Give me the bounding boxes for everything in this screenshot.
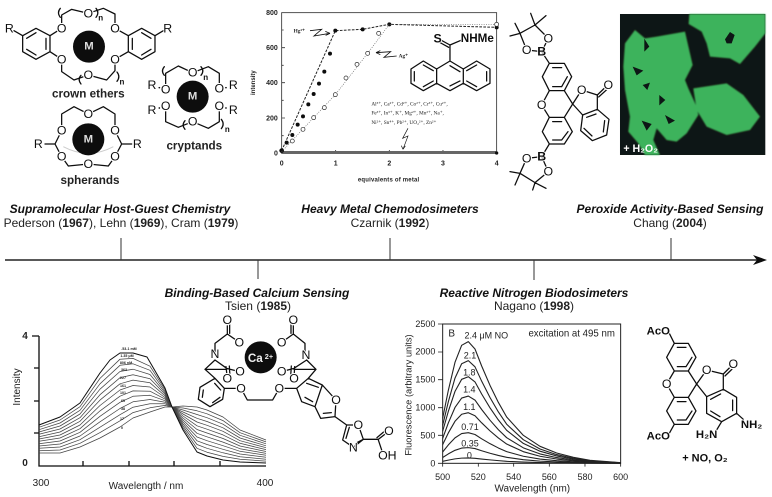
- data series: Ag+: [282, 22, 499, 152]
- molecule: cryptands: R: [229, 103, 238, 117]
- molecule: spherands: spherands: [61, 174, 119, 187]
- chart frame: [282, 13, 497, 153]
- axis ticks and labels: 520: [471, 472, 486, 482]
- y axis ticks and labels: 800: [266, 10, 278, 17]
- concentration labels: 101: [120, 391, 126, 395]
- concentration labels: 0: [121, 426, 123, 430]
- molecule: anthracene thioamide: [411, 32, 494, 91]
- molecule: calcium chelator: O: [277, 335, 286, 349]
- axis ticks and labels: 1500: [415, 375, 435, 385]
- milestone: supramolecular host-guest chemistry: Pederson (1967), Lehn (1969), Cram (1979): [4, 216, 238, 230]
- annotation: Ag+: Ag⁺: [399, 53, 408, 59]
- molecule: crown ethers: n: [98, 14, 103, 23]
- concentration labels: 38: [121, 407, 125, 411]
- panel: nitric oxide fluorescence chart: [403, 319, 762, 495]
- molecule: calcium chelator: O: [331, 393, 341, 407]
- molecule: spherands: R: [133, 137, 142, 151]
- axis labels: 4: [22, 331, 28, 342]
- milestone: binding-based calcium sensing: [165, 286, 350, 313]
- y axis ticks and labels: 4: [495, 160, 499, 167]
- concentration labels: 363: [121, 368, 127, 372]
- y axis ticks and labels: 2: [387, 160, 391, 167]
- molecule: cryptands: R: [148, 103, 157, 117]
- molecule: diacetyl diaminofluorescein: H₂N: [696, 429, 717, 441]
- fluorescence curves: [443, 342, 621, 463]
- curve and panel labels: 0: [467, 451, 472, 461]
- molecule: crown ethers: O: [110, 21, 120, 35]
- milestone: peroxide activity-based sensing: [577, 202, 764, 230]
- molecule: calcium chelator: 2+: [265, 352, 273, 361]
- axis labels: 300: [33, 478, 50, 489]
- image: fluorescence micrograph: [620, 14, 765, 155]
- data series: Hg2+: [279, 22, 499, 155]
- chart axes: [32, 336, 266, 466]
- axis ticks and labels: 1000: [415, 402, 435, 412]
- milestone: heavy metal chemodosimeters: Heavy Metal Chemodosimeters: [301, 202, 479, 216]
- molecule: spherands: R: [34, 137, 43, 151]
- annotation: other metal ions: Fe³⁺, In³⁺, K⁺, Mg²⁺, Mn²⁺, Na⁺,: [371, 111, 444, 117]
- concentration labels: 65: [121, 399, 125, 403]
- y axis ticks and labels: 600: [266, 45, 278, 52]
- axis ticks and labels: Fluorescence (arbitrary units): [403, 334, 413, 456]
- molecule: diacetyl diaminofluorescein: + NO, O₂: [682, 452, 728, 464]
- curve and panel labels: [448, 328, 615, 461]
- timeline axis with arrow: [5, 238, 767, 280]
- molecule: calcium chelator: O: [236, 381, 246, 395]
- molecule: spherands: O: [57, 124, 66, 138]
- molecule: calcium chelator: O: [235, 335, 244, 349]
- molecule: anthracene thioamide: NHMe: [461, 32, 494, 45]
- molecule: cryptands: O: [161, 99, 170, 113]
- molecule: calcium chelator: O: [289, 313, 298, 327]
- molecule: diacetyl diaminofluorescein: NH₂: [741, 419, 762, 431]
- axis labels: Wavelength / nm: [109, 481, 183, 492]
- molecule: cryptands: O: [188, 66, 197, 80]
- panel: heavy metal titration chart: [251, 10, 499, 184]
- molecule: crown ethers: R: [163, 21, 172, 35]
- milestone: peroxide activity-based sensing: Peroxide Activity-Based Sensing: [577, 202, 764, 216]
- molecule: cryptands: R: [229, 78, 238, 92]
- concentration labels: [120, 347, 137, 430]
- concentration labels: 1.35 μM: [120, 354, 134, 358]
- molecule: cryptands: O: [161, 82, 170, 96]
- milestone: supramolecular host-guest chemistry: Supramolecular Host-Guest Chemistry: [10, 202, 232, 216]
- molecule: spherands: O: [84, 157, 93, 171]
- axis ticks and labels: 500: [435, 472, 450, 482]
- milestone: binding-based calcium sensing: Tsien (1985): [225, 299, 291, 313]
- molecule: boronate fluorescein: O: [577, 83, 586, 97]
- annotation: Hg2+: [294, 28, 330, 36]
- axis ticks and labels: 540: [506, 472, 521, 482]
- molecule: calcium chelator: Ca: [248, 352, 263, 365]
- concentration labels: 806 nM: [120, 361, 132, 365]
- molecule: calcium chelator: O: [277, 365, 286, 379]
- y axis ticks and labels: 0: [280, 160, 284, 167]
- molecule: crown ethers: O: [57, 21, 66, 35]
- milestone: reactive nitrogen biodosimeters: Reactive Nitrogen Biodosimeters: [440, 286, 629, 300]
- molecule: cryptands: cryptands: [166, 139, 222, 152]
- curve and panel labels: 1.1: [463, 402, 476, 412]
- curve and panel labels: 1.4: [463, 385, 476, 395]
- annotation: Hg2+: Hg²⁺: [294, 28, 305, 34]
- y axis ticks and labels: 1: [334, 160, 338, 167]
- annotation: Ag+: [376, 51, 408, 59]
- concentration labels: .53-1 mM: [121, 347, 137, 351]
- axis labels: 400: [257, 478, 274, 489]
- milestone: supramolecular host-guest chemistry: [4, 202, 238, 230]
- molecule: crown ethers: O: [110, 52, 120, 66]
- molecule: spherands: O: [110, 124, 120, 138]
- spectra curves: [39, 353, 266, 463]
- y axis ticks and labels: 200: [266, 115, 278, 122]
- y axis ticks and labels: 3: [441, 160, 445, 167]
- molecule: boronate fluorescein: B: [537, 150, 546, 164]
- annotation: other metal ions: Al³⁺, Ca²⁺, Cd²⁺, Co²⁺, Cr³⁺, Cu²⁺,: [371, 101, 448, 107]
- annotation: other metal ions: Ni²⁺, Sn⁴⁺, Pb²⁺, UO₂²⁺, Zn²⁺: [371, 120, 437, 126]
- axis ticks and labels: 580: [577, 472, 592, 482]
- milestone: peroxide activity-based sensing: Chang (2004): [633, 216, 707, 230]
- molecule: diacetyl diaminofluorescein: [647, 326, 762, 464]
- panel: calcium spectra chart: [12, 331, 274, 492]
- molecule: cryptands: O: [215, 81, 224, 95]
- molecule: cryptands: O: [188, 115, 197, 129]
- molecule: boronate fluorescein: O: [604, 78, 613, 92]
- milestone: reactive nitrogen biodosimeters: Nagano (1998): [494, 299, 574, 313]
- label: H2O2: + H₂O₂: [623, 143, 658, 155]
- molecule: calcium chelator: O: [223, 313, 232, 327]
- molecule: calcium chelator: OH: [378, 449, 397, 463]
- molecule: calcium chelator: N: [302, 348, 310, 362]
- concentration labels: 227: [120, 376, 126, 380]
- molecule: diacetyl diaminofluorescein: AcO: [647, 431, 670, 443]
- molecule: cryptands: n: [203, 73, 208, 82]
- milestone: heavy metal chemodosimeters: Czarnik (1992): [351, 216, 429, 230]
- molecule: diacetyl diaminofluorescein: AcO: [647, 326, 670, 338]
- molecule: cryptands: [148, 66, 238, 152]
- concentration labels: 161: [120, 384, 126, 388]
- molecule: cryptands: O: [215, 99, 224, 113]
- curve and panel labels: 1.8: [463, 368, 476, 378]
- concentration labels: 17: [120, 417, 124, 421]
- molecule: calcium chelator: N: [349, 440, 358, 454]
- molecule: calcium chelator: O: [354, 418, 363, 432]
- curve and panel labels: excitation at 495 nm: [528, 329, 615, 340]
- molecule: spherands: O: [57, 150, 66, 164]
- axis ticks and labels: 600: [613, 472, 628, 482]
- molecule: calcium chelator: N: [211, 347, 219, 361]
- molecule: boronate fluorescein: [510, 13, 613, 190]
- molecule: calcium chelator: [198, 313, 397, 463]
- molecule: calcium chelator: O: [223, 371, 232, 385]
- molecule: crown ethers: crown ethers: [52, 88, 125, 101]
- y axis ticks and labels: [251, 10, 499, 184]
- molecule: spherands: M: [84, 133, 93, 145]
- curve and panel labels: 0.71: [461, 422, 479, 432]
- curve and panel labels: 2.4 μM NO: [465, 331, 508, 341]
- curve and panel labels: B: [448, 328, 455, 339]
- milestone: reactive nitrogen biodosimeters: [440, 286, 629, 313]
- molecule: calcium chelator: O: [275, 381, 284, 395]
- molecule: boronate fluorescein: O: [522, 43, 531, 57]
- axis ticks and labels: 2500: [415, 319, 435, 329]
- axis ticks and labels: Wavelength (nm): [494, 484, 570, 495]
- molecule: boronate fluorescein: O: [544, 165, 553, 179]
- molecule: boronate fluorescein: O: [522, 151, 531, 165]
- data series: baseline metals: [282, 149, 497, 155]
- molecule: crown ethers: O: [57, 52, 66, 66]
- molecule: cryptands: M: [188, 91, 197, 103]
- molecule: crown ethers: n: [120, 78, 125, 87]
- molecule: boronate fluorescein: B: [537, 45, 546, 59]
- axis labels: 0: [22, 458, 28, 469]
- molecule: cryptands: n: [225, 125, 230, 134]
- molecule: calcium chelator: O: [289, 371, 299, 385]
- axis ticks and labels: 0: [430, 458, 435, 468]
- y axis ticks and labels: intensity: [251, 70, 257, 95]
- axis ticks and labels: 560: [542, 472, 557, 482]
- axis labels: Intensity: [12, 368, 23, 406]
- axis ticks and labels: 2000: [415, 347, 435, 357]
- molecule: crown ethers: O: [84, 6, 93, 20]
- milestone: binding-based calcium sensing: Binding-Based Calcium Sensing: [165, 286, 350, 300]
- molecule: diacetyl diaminofluorescein: O: [729, 357, 738, 371]
- panel: supramolecular host-guest structures: [5, 6, 238, 187]
- axis ticks and labels: 500: [420, 430, 435, 440]
- panel: peroxide probe and cell image: [510, 13, 765, 190]
- molecule: spherands: [34, 107, 142, 187]
- molecule: spherands: O: [110, 150, 120, 164]
- axis labels: [12, 331, 274, 492]
- molecule: crown ethers: O: [84, 68, 93, 82]
- y axis ticks and labels: equivalents of metal: [358, 178, 420, 184]
- curve and panel labels: 0.35: [461, 439, 479, 449]
- molecule: cryptands: R: [148, 78, 157, 92]
- milestone: heavy metal chemodosimeters: [301, 202, 479, 230]
- molecule: anthracene thioamide: S: [434, 32, 442, 46]
- annotation: other metal ions: [371, 101, 448, 149]
- chart frame: [443, 324, 621, 463]
- curve and panel labels: 2.1: [464, 350, 476, 360]
- molecule: crown ethers: [5, 6, 172, 101]
- molecule: crown ethers: M: [84, 41, 94, 53]
- molecule: diacetyl diaminofluorescein: O: [662, 377, 671, 391]
- molecule: crown ethers: R: [5, 21, 14, 35]
- molecule: diacetyl diaminofluorescein: O: [702, 363, 711, 377]
- molecule: boronate fluorescein: O: [544, 31, 553, 45]
- y axis ticks and labels: 400: [266, 80, 278, 87]
- axis ticks and labels: [403, 319, 628, 495]
- molecule: spherands: O: [84, 107, 93, 121]
- molecule: calcium chelator: O: [384, 424, 394, 438]
- molecule: boronate fluorescein: O: [537, 98, 546, 112]
- y axis ticks and labels: 0: [274, 151, 278, 158]
- molecule: calcium chelator: O: [235, 365, 245, 379]
